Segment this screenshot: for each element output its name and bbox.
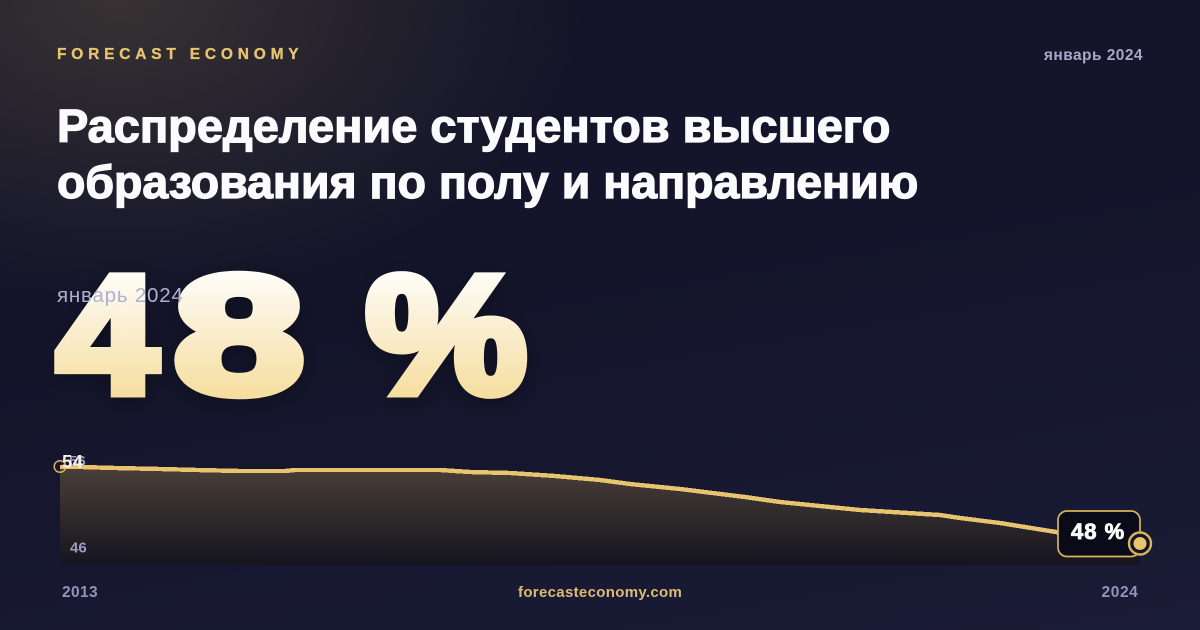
start value label: 54 — [62, 451, 84, 472]
title: Распределение студентов высшего — [57, 100, 890, 152]
area fill — [60, 467, 1140, 565]
callout: current value: 48 % — [1071, 519, 1125, 544]
title: образования по полу и направлению — [57, 156, 918, 208]
big value: % — [366, 242, 526, 428]
callout: current value — [1058, 511, 1140, 556]
big value: 4 — [57, 242, 157, 428]
end marker — [1129, 532, 1151, 554]
title — [57, 100, 918, 208]
axis min label: 46 — [70, 540, 87, 556]
trend line — [60, 467, 1140, 544]
start marker — [54, 461, 66, 472]
area chart — [60, 467, 1140, 565]
axis max muted label: 56 — [69, 453, 86, 470]
big value: 8 — [174, 242, 304, 429]
start year: 2013 — [62, 584, 98, 601]
source url: forecasteconomy.com — [518, 584, 682, 601]
brand label: FORECAST ECONOMY — [57, 46, 303, 63]
date over big value: январь 2024 — [57, 284, 184, 307]
big value — [57, 242, 526, 429]
end year: 2024 — [1102, 584, 1138, 601]
top date: январь 2024 — [1044, 47, 1143, 64]
